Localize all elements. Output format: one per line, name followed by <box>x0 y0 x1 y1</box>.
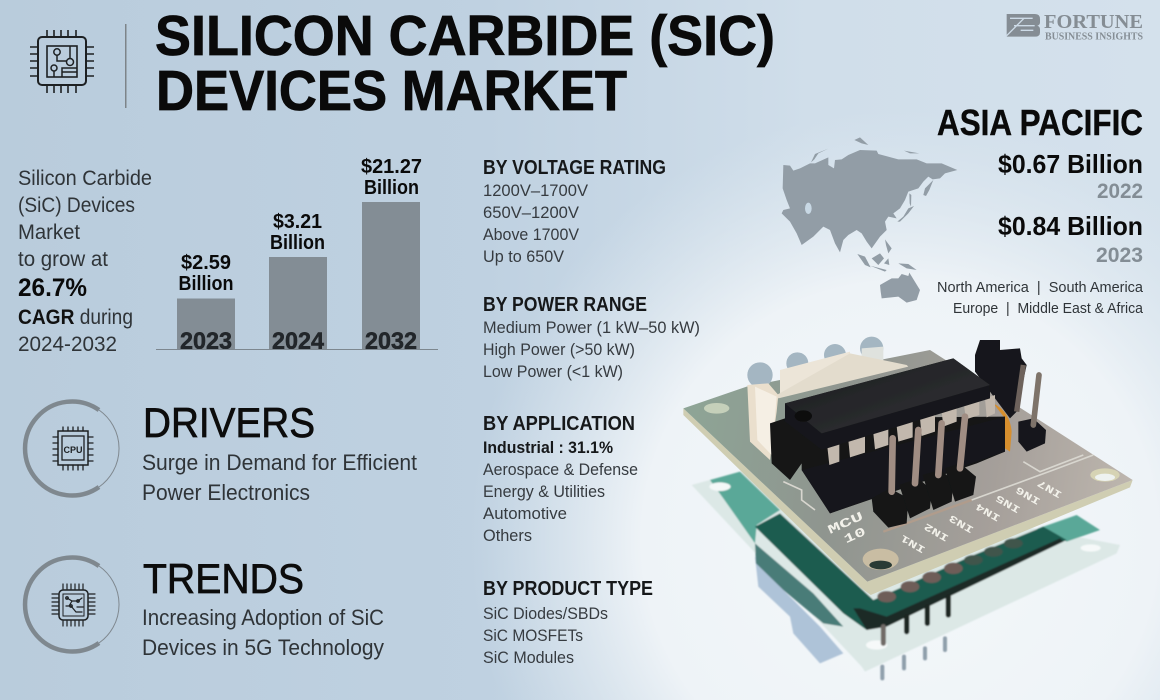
bar 2023: Billion <box>178 273 234 295</box>
translucent glass outline <box>692 472 1120 672</box>
market growth text: CAGR during <box>18 306 133 329</box>
divider <box>125 24 126 108</box>
LEDs <box>747 337 883 388</box>
board top surface <box>683 350 1133 582</box>
regional data: North America | South America <box>937 279 1144 296</box>
bar 2032: Billion <box>364 177 419 199</box>
logo wordmark: BUSINESS INSIGHTS <box>1045 32 1143 42</box>
printed labels <box>826 477 1064 555</box>
teal area right <box>1043 515 1100 542</box>
segment: by product type <box>483 578 653 667</box>
segment: by application: Energy & Utilities <box>483 482 605 501</box>
bar 2024: $3.21 <box>273 211 322 233</box>
market growth text <box>18 167 152 356</box>
drivers text: DRIVERS <box>143 399 315 446</box>
printed labels: IN7 <box>1036 477 1064 500</box>
segment: by power range: High Power (>50 kW) <box>483 340 635 359</box>
arctic islands <box>811 137 919 162</box>
segment: by application <box>483 413 638 545</box>
trend ring icon <box>25 558 119 652</box>
board edge <box>683 408 1133 595</box>
printed labels: IN5 <box>994 492 1022 515</box>
IC socket <box>770 417 1005 513</box>
printed labels: IN3 <box>947 512 976 535</box>
Sakhalin and Japan <box>897 180 933 222</box>
upper board <box>683 337 1133 595</box>
trends text: Devices in 5G Technology <box>142 635 384 660</box>
title: DEVICES MARKET <box>156 59 627 123</box>
title: SILICON CARBIDE (SIC) <box>155 4 775 68</box>
segment: by voltage rating: 650V–1200V <box>483 203 580 222</box>
segment: by power range <box>483 294 700 381</box>
mounting holes <box>704 403 729 414</box>
bar 2032: 2032 <box>365 328 417 355</box>
segment: by power range: Low Power (<1 kW) <box>483 362 623 381</box>
segment: by application: Aerospace & Defense <box>483 460 638 479</box>
regional data <box>937 102 1144 317</box>
segment: by product type: BY PRODUCT TYPE <box>483 578 653 600</box>
segment: by application: Automotive <box>483 504 567 523</box>
Caspian Sea <box>805 203 812 214</box>
segment: by product type: SiC Modules <box>483 648 574 667</box>
left pale reflection <box>755 557 843 663</box>
trends text: TRENDS <box>143 555 304 602</box>
segment: by voltage rating: 1200V–1700V <box>483 181 589 200</box>
market growth text: to grow at <box>18 248 108 271</box>
teal area left <box>710 472 780 543</box>
title <box>155 4 775 123</box>
regional data: 2022 <box>1097 180 1143 203</box>
bar 2023 <box>177 252 235 355</box>
bar 2024 <box>269 211 327 355</box>
pads <box>964 538 1023 565</box>
printed labels: IN2 <box>922 520 951 543</box>
segment: by product type: SiC Diodes/SBDs <box>483 604 608 623</box>
drivers text: Surge in Demand for Efficient <box>142 450 417 475</box>
market growth text: 2024-2032 <box>18 333 117 356</box>
icon: chip with circuit <box>30 30 94 93</box>
photo: stacked circuit boards <box>683 337 1133 678</box>
logo wordmark <box>1044 11 1143 42</box>
market growth text: 26.7% <box>18 274 87 302</box>
header pins <box>892 417 965 492</box>
holes <box>709 482 731 491</box>
market growth text: Market <box>18 221 80 244</box>
driver ring icon <box>25 402 119 496</box>
IC pins <box>827 395 995 465</box>
segment: by voltage rating: Above 1700V <box>483 225 580 244</box>
market growth text: Silicon Carbide <box>18 167 152 190</box>
black jumper <box>975 340 1027 418</box>
bar 2023: 2023 <box>180 328 232 355</box>
segment: by application: BY APPLICATION <box>483 413 635 435</box>
single pin and block <box>1018 418 1046 452</box>
logo wordmark: FORTUNE <box>1044 11 1143 33</box>
regional data: $0.67 Billion <box>998 149 1143 179</box>
segment: by power range: Medium Power (1 kW–50 kW) <box>483 318 700 337</box>
logo: Fortune Business Insights <box>1006 11 1143 42</box>
header blocks <box>872 463 976 528</box>
market growth text: (SiC) Devices <box>18 194 135 217</box>
trends text: Increasing Adoption of SiC <box>142 605 384 630</box>
segment: by voltage rating: BY VOLTAGE RATING <box>483 157 666 179</box>
printed labels: 10 <box>842 524 868 547</box>
orange capacitor <box>993 403 1012 452</box>
printed labels: MCU <box>826 509 866 538</box>
drivers text <box>142 399 417 505</box>
printed labels: IN4 <box>974 500 1002 523</box>
bar 2032: $21.27 <box>361 156 422 178</box>
icon: CPU: CPU <box>63 445 83 455</box>
Australia <box>880 273 920 303</box>
printed labels: IN6 <box>1014 484 1042 507</box>
printed labels: IN1 <box>899 532 927 555</box>
white connector <box>747 347 908 460</box>
trends text <box>142 555 384 660</box>
segment: by power range: BY POWER RANGE <box>483 294 647 316</box>
drivers text: Power Electronics <box>142 480 310 505</box>
lower reflected board <box>692 472 1120 678</box>
pins under board <box>882 597 948 678</box>
IC body <box>785 358 990 450</box>
dark green PCB <box>755 513 1067 630</box>
segment: by product type: SiC MOSFETs <box>483 626 583 645</box>
bar chart <box>156 156 438 355</box>
regional data: Europe | Middle East & Africa <box>953 300 1144 317</box>
logo mark <box>1006 14 1040 37</box>
segment: by application: Others <box>483 526 532 545</box>
icon: circuit chip <box>52 584 95 626</box>
regional data: $0.84 Billion <box>998 211 1143 241</box>
bar 2023: $2.59 <box>181 252 231 274</box>
printed outlines <box>883 500 972 532</box>
Southeast Asia islands <box>857 239 917 272</box>
map: Asia Pacific <box>782 137 957 303</box>
segment: by voltage rating <box>483 157 666 266</box>
bar 2024: 2024 <box>272 328 325 355</box>
segment: by voltage rating: Up to 650V <box>483 247 565 266</box>
bar 2032 <box>361 156 422 355</box>
regional data: 2023 <box>1096 244 1143 267</box>
segment: by application: Industrial : 31.1% <box>483 438 613 457</box>
bar 2024: Billion <box>270 232 325 254</box>
